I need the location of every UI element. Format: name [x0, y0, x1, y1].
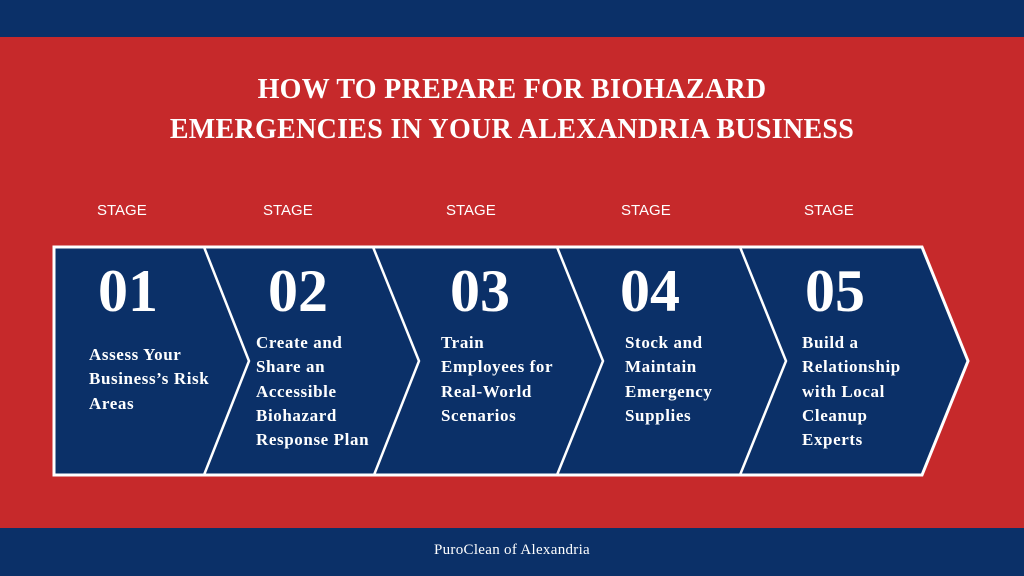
stage 2: 02 [268, 258, 328, 324]
stage 2: Response Plan [256, 430, 369, 449]
stage 5: Build a [802, 333, 859, 352]
stage 5: Experts [802, 430, 863, 449]
stage 5: Cleanup [802, 406, 868, 425]
stage labels: STAGE [804, 202, 854, 219]
title: EMERGENCIES IN YOUR ALEXANDRIA BUSINESS [170, 114, 854, 145]
stage 5: Relationship [802, 357, 901, 376]
stage 3 [441, 258, 553, 425]
stage 4 [620, 258, 713, 425]
stage 3: Real-World [441, 382, 532, 401]
stage 3: 03 [450, 258, 510, 324]
stage 1: Business’s Risk [89, 369, 209, 388]
stage 4: 04 [620, 258, 680, 324]
stage 4: Maintain [625, 357, 697, 376]
footer [0, 528, 1024, 576]
title [170, 74, 854, 145]
stage 1 [89, 258, 209, 413]
stage 3: Train [441, 333, 484, 352]
stage labels [97, 202, 854, 219]
stage labels: STAGE [621, 202, 671, 219]
stage 4: Supplies [625, 406, 691, 425]
stage 3: Employees for [441, 357, 553, 376]
stage 1: Areas [89, 394, 134, 413]
footer: PuroClean of Alexandria [434, 542, 590, 558]
stage 5 [802, 258, 901, 449]
stage 4: Stock and [625, 333, 703, 352]
stage labels: STAGE [263, 202, 313, 219]
stage 2: Share an [256, 357, 325, 376]
stage 3: Scenarios [441, 406, 516, 425]
stage 1: 01 [98, 258, 158, 324]
stage 2: Biohazard [256, 406, 337, 425]
stage 2: Create and [256, 333, 342, 352]
stage labels: STAGE [97, 202, 147, 219]
stage 5: with Local [802, 382, 885, 401]
stage 5: 05 [805, 258, 865, 324]
stage labels: STAGE [446, 202, 496, 219]
stage 2 [256, 258, 369, 449]
top band [0, 0, 1024, 37]
stage 4: Emergency [625, 382, 713, 401]
stage 2: Accessible [256, 382, 337, 401]
title: HOW TO PREPARE FOR BIOHAZARD [258, 74, 766, 105]
stage 1: Assess Your [89, 345, 181, 364]
